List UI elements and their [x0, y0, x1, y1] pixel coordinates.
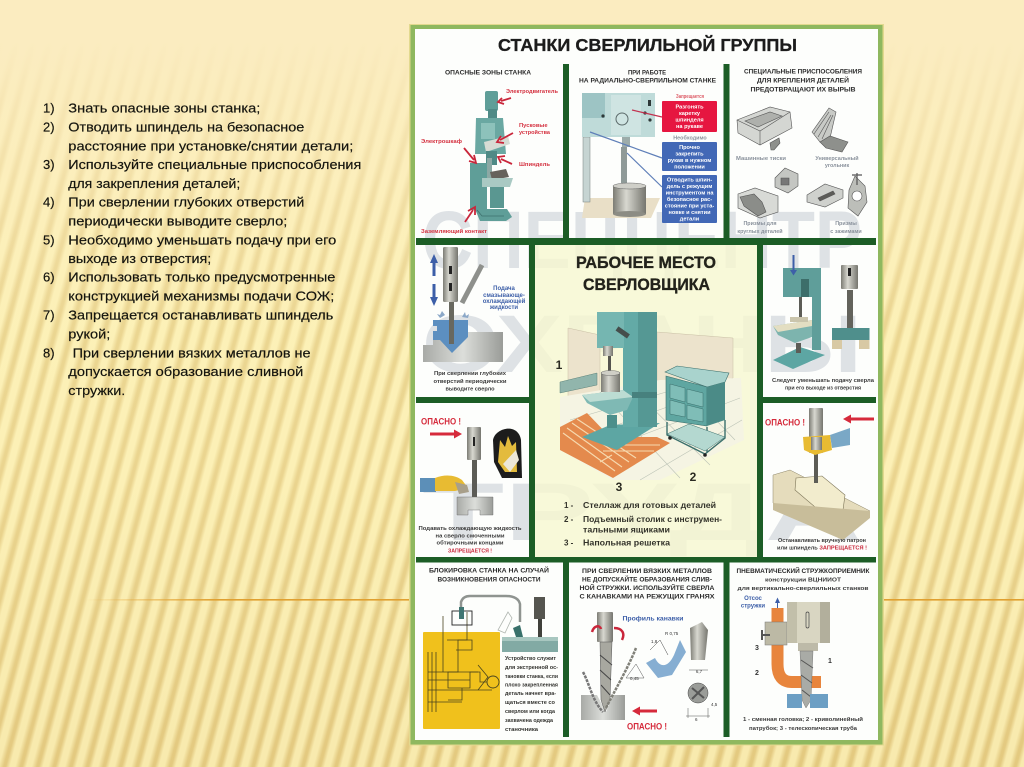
illustration: work plate and blue coolant: [423, 302, 503, 362]
label: required: Необходимо: [673, 134, 707, 142]
label: machine vise: Машинные тиски: [736, 156, 786, 162]
rule 4: периодически выводите сверло;: [68, 214, 287, 228]
heading: ПРИ СВЕРЛЕНИИ ВЯЗКИХ МЕТАЛЛОВ: [582, 568, 712, 575]
reference numbers: 2: [755, 670, 759, 677]
label: universal angle plate: Универсальный: [815, 155, 859, 162]
panel: viscous metals: [580, 568, 718, 732]
panel: deep hole drilling: [423, 247, 526, 392]
caption: 1 - сменная головка; 2 - криволинейный: [743, 716, 864, 723]
caption: [434, 370, 507, 392]
coolant label: охлаждающей: [483, 298, 526, 305]
caption: [772, 378, 875, 392]
heading: СПЕЦИАЛЬНЫЕ ПРИСПОСОБЛЕНИЯ: [744, 68, 862, 76]
machine zone labels: устройства: [519, 129, 551, 136]
illustration: clamp: [762, 622, 787, 645]
rule 5: [43, 232, 336, 266]
reference numbers: 3: [755, 645, 759, 652]
rule 7: рукой;: [68, 326, 110, 342]
icon: blue feed double arrow: [430, 254, 438, 306]
label: chip suction: стружки: [741, 604, 765, 610]
illustration: table with workpiece: [773, 470, 870, 540]
poster: [409, 24, 884, 746]
rule 7: 7): [43, 308, 55, 322]
rule 8: При сверлении вязких металлов не: [73, 346, 311, 360]
rule 6: конструкцией механизмы подачи СОЖ;: [68, 288, 334, 304]
red warning box: каретку: [679, 111, 701, 117]
panel: reduce feed at exit: [772, 255, 875, 392]
illustration: chuck: [443, 247, 458, 302]
machine zone labels: [421, 89, 558, 235]
coolant label: Подача: [493, 286, 516, 292]
legend: 2 -: [564, 515, 574, 524]
illustration: drill exit detail: [832, 265, 870, 349]
red pointer arrows: [464, 98, 513, 222]
rule 5: выходе из отверстия;: [68, 251, 211, 266]
rule 8: 8): [43, 346, 55, 360]
explanation text: щаться вместе со: [505, 700, 556, 706]
main title: СТАНКИ СВЕРЛИЛЬНОЙ ГРУППЫ: [498, 34, 797, 55]
label: round-part prisms: [737, 221, 783, 235]
label: round-part prisms: Призмы для: [743, 221, 777, 227]
watermark: [422, 195, 862, 558]
illustration: drill tip: [690, 622, 708, 660]
heading: ПНЕВМАТИЧЕСКИЙ СТРУЖКОПРИЕМНИК: [736, 566, 870, 575]
rule 6: Использовать только предусмотренные: [68, 270, 335, 284]
rule 5: Необходимо уменьшать подачу при его: [68, 232, 336, 248]
blue instruction box 2: инструментом на: [666, 190, 714, 196]
heading: ПРИ РАБОТЕ: [628, 70, 667, 76]
rule 3: 3): [43, 157, 55, 172]
rule 3: Используйте специальные приспособления: [68, 157, 361, 172]
legend: [564, 501, 722, 548]
machine zone labels: Электрошкаф: [421, 138, 462, 145]
caption: на сверло смоченными: [436, 534, 505, 540]
caption: ЗАПРЕЩАЕТСЯ !: [448, 548, 492, 554]
rule 1: 1): [43, 100, 55, 116]
heading: [579, 70, 717, 84]
rule 4: 4): [43, 194, 55, 210]
caption: [418, 526, 522, 554]
heading: СВЕРЛОВЩИКА: [583, 276, 710, 294]
blue instruction box 1: рукав в нужном: [668, 158, 711, 164]
rule 3: для закрепления деталей;: [68, 176, 240, 191]
rule 2: 2): [43, 120, 55, 134]
watermark: ОХРАНЫ: [422, 299, 862, 390]
dividers: [416, 64, 876, 737]
illustration: blue support blocks: [787, 694, 828, 708]
icon: blue down arrow: [790, 255, 797, 276]
explanation text: деталь начнет вра-: [505, 691, 556, 697]
legend: 3 -: [564, 538, 574, 548]
panel: radial drilling machine: [579, 70, 717, 223]
heading: ОПАСНЫЕ ЗОНЫ СТАНКА: [445, 70, 531, 76]
tool cabinet: [665, 366, 729, 457]
legend: 1 -: [564, 501, 574, 510]
caption: Останавливать вручную патрон: [778, 538, 866, 544]
explanation text: [505, 655, 558, 733]
illustration: hand with rag: [420, 476, 469, 494]
heading: БЛОКИРОВКА СТАНКА НА СЛУЧАЙ: [429, 566, 549, 574]
heading: для вертикально-сверлильных станков: [738, 586, 869, 592]
caption: патрубок; 3 - телескопическая труба: [749, 725, 858, 732]
illustration: vertical drilling machine: [470, 91, 513, 221]
explanation text: сверлом или когда: [505, 709, 556, 715]
heading: С КАНАВКАМИ НА РЕЖУЩИХ ГРАНЯХ: [580, 594, 715, 600]
reference numbers: 3: [616, 480, 623, 494]
illustration: yellow circuit diagram: [423, 612, 500, 729]
icon: red arrow: [430, 430, 462, 438]
illustration: drill cross-section: 6: [695, 717, 698, 722]
explanation text: тановки станка, если: [505, 674, 558, 680]
machine zone labels: Электродвигатель: [506, 89, 558, 95]
red warning box: шпинделя: [675, 118, 704, 124]
blue instruction box 2: безопасное рас-: [667, 196, 712, 203]
rule 8: допускается образование сливной: [68, 364, 303, 379]
panel: danger zones of the machine: [421, 70, 558, 235]
caption: Подавать охлаждающую жидкость: [418, 526, 522, 532]
caption: обтирочными концами: [436, 540, 504, 546]
coolant label: смазывающе-: [483, 293, 525, 299]
red warning box: Разгонять: [675, 104, 704, 110]
heading: конструкции ВЦНИИОТ: [765, 578, 842, 584]
caption: [743, 716, 864, 732]
label: clamped prisms: с зажимами: [830, 229, 862, 235]
explanation text: захвачена одежда: [505, 718, 554, 724]
rule 2: [43, 120, 353, 154]
illustration: safety sensor tube: [452, 596, 523, 637]
icon: round-part prisms: [738, 168, 798, 218]
heading: НОЙ СТРУЖКИ. ИСПОЛЬЗУЙТЕ СВЕРЛА: [580, 583, 715, 592]
explanation text: станочника: [505, 727, 539, 733]
icon: red rotation arrows: [592, 626, 623, 640]
illustration: radial drill: [582, 93, 660, 218]
coolant label: [483, 286, 526, 311]
warning label: ОПАСНО !: [627, 722, 667, 732]
rule 7: [43, 308, 334, 342]
rule 1: Знать опасные зоны станка;: [68, 100, 260, 116]
rule 6: 6): [43, 270, 55, 284]
legend: Подъемный столик с инструмен-: [583, 515, 722, 524]
illustration: groove profile: 0,45: [630, 676, 639, 681]
decorative orange line right: [883, 599, 1024, 601]
caption: при его выходе из отверстия: [785, 386, 861, 392]
illustration: coolant nozzle: [462, 265, 482, 303]
label: round-part prisms: круглых деталей: [737, 228, 783, 235]
caption: отверстий периодически: [434, 378, 507, 385]
panel: emergency interlock: [423, 566, 558, 733]
illustration: gloved hand: [803, 428, 850, 455]
explanation text: плохо закрепленная: [505, 682, 558, 688]
floor grating: [560, 413, 670, 478]
illustration: drill cross-section: 4,5: [711, 702, 718, 707]
heading: ПРЕДОТВРАЩАЮТ ИХ ВЫРЫВ: [750, 86, 856, 94]
legend: Напольная решетка: [583, 538, 671, 548]
blue instruction box 1: [662, 142, 717, 171]
blue instruction box 1: закрепить: [675, 152, 704, 158]
illustration: orange tube: [778, 608, 821, 682]
poster frame: [409, 24, 884, 746]
illustration: chuck and drill: [809, 408, 823, 483]
icon: red arrow: [632, 706, 657, 716]
rule 7: Запрещается останавливать шпиндель: [68, 308, 334, 322]
explanation text: для экстренной ос-: [505, 664, 558, 671]
illustration: groove profile: R 0,75: [665, 631, 679, 636]
caption: При сверлении глубоких: [434, 370, 507, 377]
rule 4: [43, 194, 304, 228]
rule 4: При сверлении глубоких отверстий: [68, 194, 304, 210]
label: clamped prisms: [830, 221, 862, 235]
blue instruction box 2: стояние при уста-: [665, 204, 714, 210]
icon: machine vise: [737, 107, 792, 150]
blue instruction box 2: дель с режущим: [667, 184, 712, 190]
legend: Стеллаж для готовых деталей: [583, 501, 716, 510]
red warning box: [662, 101, 717, 132]
drilling machine: [582, 312, 660, 450]
blue instruction box 1: положении: [674, 164, 705, 170]
blue instruction box 2: Отводить шпин-: [667, 178, 712, 184]
label: forbidden: Запрещается: [676, 94, 704, 100]
label: chip suction: [741, 596, 765, 610]
tiled floor: [560, 378, 744, 480]
rule 3: [43, 157, 361, 191]
panel: special fixtures: [736, 68, 867, 235]
illustration: groove profile: [626, 631, 686, 681]
icon: red arrow left: [843, 414, 874, 424]
coolant label: жидкости: [489, 305, 518, 311]
reference numbers: 2: [690, 470, 697, 484]
decorative orange line left: [85, 599, 410, 601]
blue instruction box 2: новке и снятии: [668, 210, 711, 216]
label: chip suction: Отсос: [744, 596, 763, 602]
reference numbers: [556, 358, 697, 494]
illustration: groove profile: 1,8: [651, 639, 658, 644]
rule 8: стружки.: [68, 383, 125, 398]
illustration: workshop: [560, 312, 744, 480]
warning label: ОПАСНО !: [421, 416, 461, 428]
icon: blue up arrow: [775, 598, 780, 616]
reference numbers: [755, 645, 832, 677]
label: groove profile: Профиль канавки: [622, 616, 684, 622]
heading: [429, 566, 549, 584]
caption: или шпиндель ЗАПРЕЩАЕТСЯ !: [777, 546, 867, 552]
back wall: [568, 328, 733, 400]
storage rack: [560, 373, 597, 393]
heading: ВОЗНИКНОВЕНИЯ ОПАСНОСТИ: [438, 576, 541, 584]
connector lines: [590, 110, 662, 187]
panel: do not stop spindle by hand: [765, 408, 874, 552]
illustration: spindle and drill: [787, 602, 830, 708]
icon: clamped prisms: [807, 173, 867, 216]
panel background: [535, 245, 757, 557]
reference numbers: 1: [828, 658, 832, 665]
blue instruction box 2: детали: [680, 216, 700, 222]
panel: danger hand near drill: [418, 416, 522, 554]
rule 6: [43, 270, 335, 304]
legend: тальными ящиками: [583, 526, 670, 534]
rule 2: Отводить шпиндель на безопасное: [68, 120, 304, 134]
explanation text: Устройство служит: [505, 655, 556, 662]
reference numbers: 1: [556, 358, 563, 372]
heading: [576, 254, 716, 294]
heading: НЕ ДОПУСКАЙТЕ ОБРАЗОВАНИЯ СЛИВ-: [582, 574, 712, 584]
rule 2: расстояние при установке/снятии детали;: [68, 138, 353, 154]
machine zone labels: Шпиндель: [519, 162, 550, 168]
blue instruction box 2: [662, 175, 717, 223]
illustration: drill in workpiece: [581, 612, 636, 720]
icon: universal angle plate: [812, 108, 848, 152]
numbered safety rules list: [43, 100, 361, 398]
illustration: drill cross-section: [686, 669, 718, 722]
illustration: chuck and drill: [467, 427, 481, 497]
heading: [580, 568, 715, 600]
panel: operator workplace: [535, 245, 757, 557]
caption: [777, 538, 867, 552]
blue instruction box 1: Прочно: [679, 145, 700, 151]
illustration: workpiece: [457, 497, 493, 515]
machine zone labels: Заземляющий контакт: [421, 228, 487, 235]
watermark: ТРУДА: [422, 467, 862, 558]
machine zone labels: Пусковые: [519, 123, 548, 129]
warning label: ОПАСНО !: [765, 418, 805, 428]
heading: [744, 68, 862, 94]
panel: pneumatic chip collector: [736, 566, 870, 732]
rule 5: 5): [43, 232, 55, 248]
caption: Следует уменьшать подачу сверла: [772, 378, 875, 384]
illustration: table and drill: [502, 597, 558, 652]
rule 8: [43, 346, 311, 398]
illustration: drill cross-section: 6,7: [696, 669, 703, 674]
label: clamped prisms: Призмы: [835, 221, 857, 227]
label: universal angle plate: [815, 155, 859, 169]
heading: НА РАДИАЛЬНО-СВЕРЛИЛЬНОМ СТАНКЕ: [579, 78, 717, 84]
heading: ДЛЯ КРЕПЛЕНИЯ ДЕТАЛЕЙ: [757, 76, 849, 84]
icon: glove: [493, 429, 522, 478]
heading: [736, 566, 870, 592]
caption: выводите сверло: [445, 386, 495, 392]
label: universal angle plate: угольник: [825, 163, 849, 169]
illustration: small drill press: [773, 268, 825, 369]
heading: РАБОЧЕЕ МЕСТО: [576, 254, 716, 272]
red warning box: на рукаве: [676, 124, 703, 130]
watermark: СПЕЦЦЕНТР: [422, 195, 862, 286]
